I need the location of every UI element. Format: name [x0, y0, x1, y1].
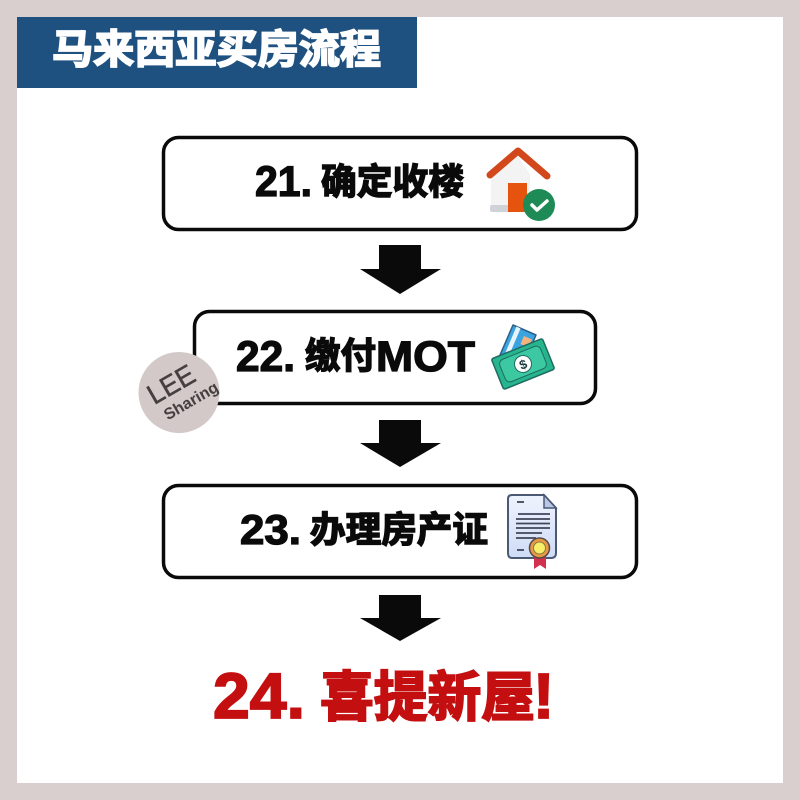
step 22 box: 22.	[236, 333, 295, 381]
step 21 box	[164, 138, 636, 230]
arrow 1	[360, 245, 441, 294]
title banner: 马来西亚买房流程	[52, 28, 381, 72]
step 23 box: 办理房产证	[310, 509, 488, 550]
step 23 box: 23.	[240, 506, 301, 553]
icon: credit card and banknote: $	[517, 356, 530, 373]
step 22 box	[194, 312, 596, 404]
step 23 box	[164, 486, 636, 578]
watermark badge: LEE Sharing	[138, 351, 222, 433]
final step: 24: 24.	[213, 660, 305, 732]
title banner	[17, 17, 417, 88]
step 22 box: 缴付	[305, 335, 376, 376]
step 22 box: MOT	[376, 333, 475, 381]
step 21 box: 确定收楼	[321, 161, 464, 202]
icon: credit card and banknote	[491, 325, 555, 390]
final step: 24: !	[533, 660, 554, 732]
final step: 24	[213, 660, 554, 732]
arrow 3	[360, 595, 441, 641]
watermark badge: LEE Sharing: LEE	[142, 358, 201, 410]
arrow 2	[360, 420, 441, 467]
final step: 24: 喜提新屋	[320, 668, 535, 728]
watermark badge: LEE Sharing: Sharing	[161, 379, 222, 424]
step 21 box: 21.	[255, 158, 312, 206]
icon: certificate document with seal	[508, 495, 556, 569]
icon: house with check mark	[490, 151, 555, 221]
